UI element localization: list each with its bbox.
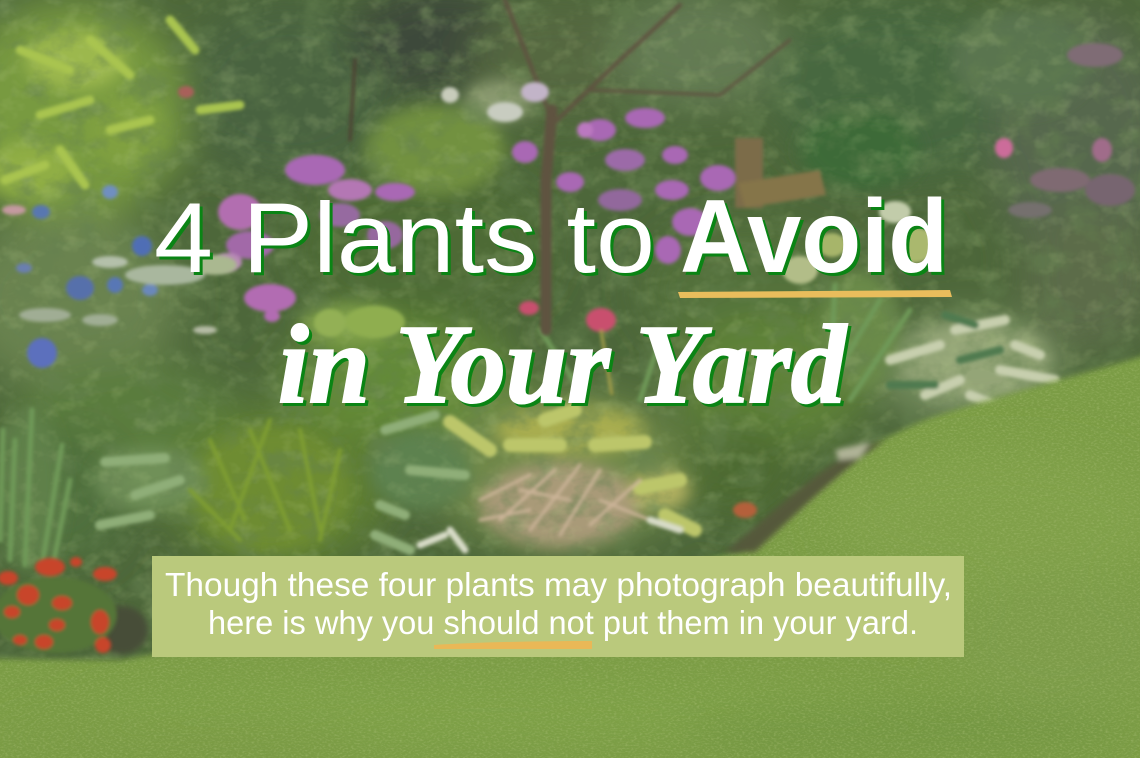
callout: subtitle panel (152, 556, 964, 657)
mulch and bed edge (96, 440, 885, 654)
pink flowers (178, 43, 1135, 395)
underline: should not (434, 641, 592, 649)
blue and white flowers (2, 82, 935, 368)
tree trunk and branches (350, 0, 790, 330)
phlox flowers: purple clusters (214, 108, 736, 322)
title line: 4 Plants to Avoid: 4 Plants to (154, 182, 655, 293)
red flowers (0, 502, 757, 653)
title line: 4 Plants to Avoid (154, 179, 948, 295)
lawn (0, 354, 1140, 758)
title line: in Your Yard: in Your Yard (278, 303, 848, 427)
title (154, 179, 952, 427)
subtitle text (165, 566, 952, 641)
subtitle text: here is why you should not put them in your yard. (208, 604, 918, 641)
title line: 4 Plants to Avoid: Avoid (680, 179, 948, 295)
foliage strokes (0, 20, 1055, 570)
underline: Avoid (678, 290, 952, 298)
subtitle text: Though these four plants may photograph beautifully, (165, 566, 952, 603)
wooden post (735, 138, 826, 208)
